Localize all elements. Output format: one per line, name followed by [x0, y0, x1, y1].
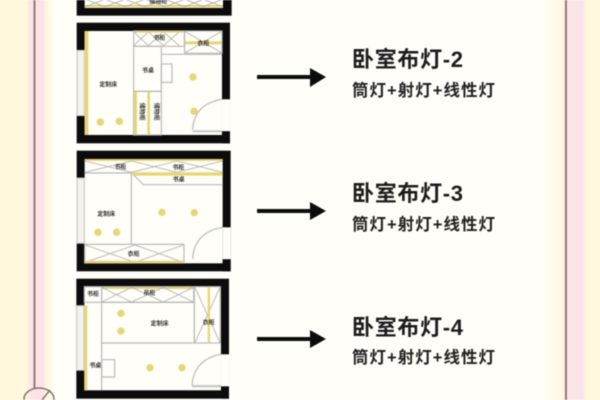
- room labels: 书柜: [87, 290, 99, 298]
- walls: [77, 23, 230, 143]
- floor plan 1 (cropped bottom): [77, 0, 232, 16]
- door: [193, 227, 223, 259]
- room labels: 衣柜: [128, 250, 140, 258]
- left decorative border band: [0, 0, 54, 400]
- room labels: 定制床: [99, 80, 117, 88]
- floor plan 2: [77, 23, 230, 143]
- heading row 3: 卧室布灯-3: [352, 181, 463, 206]
- bookcases, desk, bed, wardrobe: [85, 159, 223, 263]
- room labels: 书桌: [89, 362, 101, 370]
- door: [192, 354, 221, 385]
- floor plan 4: [76, 279, 229, 399]
- room labels: 吊柜: [143, 289, 155, 297]
- room labels: 定制床: [151, 320, 169, 328]
- room labels: 书柜: [172, 163, 184, 171]
- right decorative border band: [546, 0, 600, 400]
- room labels: 衣柜: [203, 319, 215, 327]
- cabinets, bed, desk: [84, 287, 220, 390]
- downlights: [94, 209, 198, 236]
- room labels: [87, 289, 215, 370]
- room labels: [97, 163, 185, 258]
- walls: [77, 151, 231, 271]
- downlights: [97, 73, 198, 126]
- door: [193, 99, 222, 130]
- room labels: 定制床: [97, 210, 115, 218]
- room labels: 书桌: [142, 67, 154, 75]
- room labels: 储物柜: [152, 103, 160, 121]
- room labels: 衣柜: [197, 40, 209, 48]
- room labels: [99, 34, 209, 121]
- heading row 4: 卧室布灯-4: [352, 315, 464, 340]
- subheading row 4: 筒灯+射灯+线性灯: [352, 347, 495, 367]
- icon: round ornament at bottom left: [24, 388, 54, 400]
- arrow row 4: [257, 330, 326, 348]
- walls: [76, 279, 229, 399]
- subheading row 2: 筒灯+射灯+线性灯: [352, 80, 495, 100]
- downlights: [117, 310, 186, 371]
- room labels: 书柜: [153, 34, 165, 42]
- arrow row 3: [257, 202, 326, 220]
- heading row 2: 卧室布灯-2: [352, 47, 463, 72]
- subheading row 3: 筒灯+射灯+线性灯: [352, 214, 495, 234]
- floor plan 3: [77, 151, 231, 271]
- arrow row 2: [257, 68, 326, 87]
- wardrobes and partitions: [85, 31, 222, 135]
- room labels: 书柜: [114, 163, 126, 171]
- room labels: 书桌: [173, 176, 185, 184]
- room labels: 储物柜: [138, 103, 146, 121]
